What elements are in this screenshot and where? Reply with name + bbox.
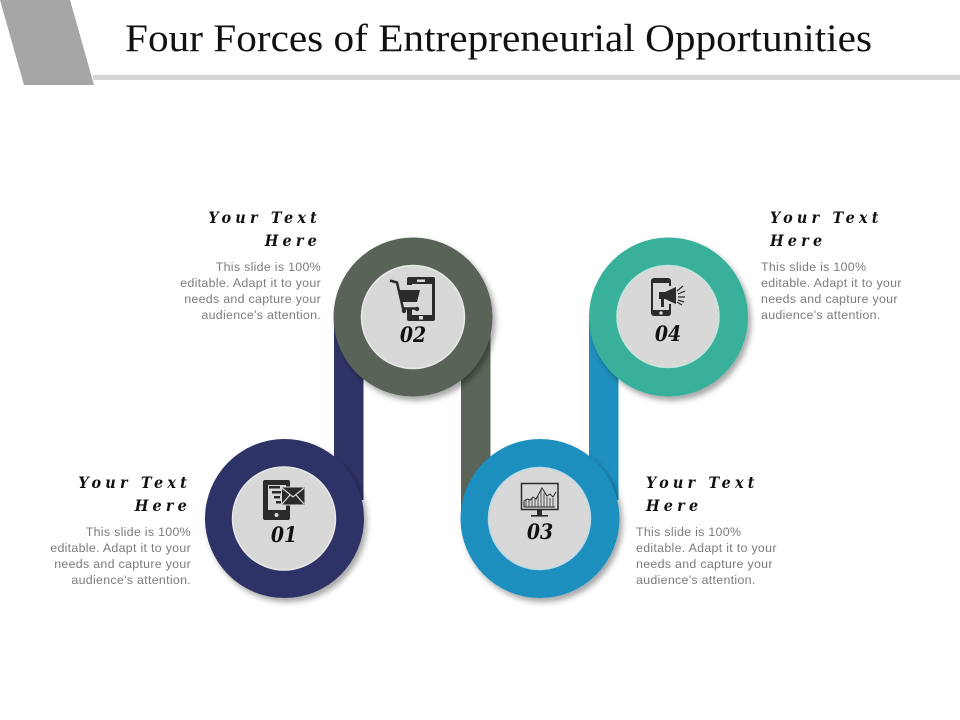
heading 03 bbox=[645, 473, 759, 515]
body 01: This slide is 100% bbox=[86, 525, 191, 539]
connector: grey bar bbox=[461, 330, 490, 510]
heading 01: Your Text bbox=[78, 473, 191, 492]
connector: blue bar bbox=[589, 320, 618, 500]
header rule bbox=[93, 75, 960, 80]
step 03 bbox=[460, 439, 620, 598]
text block 02 bbox=[180, 208, 321, 322]
body 02: This slide is 100% bbox=[216, 260, 321, 274]
body 03 bbox=[636, 525, 777, 587]
heading 01: Here bbox=[134, 496, 191, 515]
connector: navy bar bbox=[334, 320, 364, 500]
body 04: This slide is 100% bbox=[761, 260, 866, 274]
body 04: editable. Adapt it to your bbox=[761, 276, 902, 290]
body 03: editable. Adapt it to your bbox=[636, 541, 777, 555]
heading 02: Your Text bbox=[208, 208, 321, 227]
body 03: This slide is 100% bbox=[636, 525, 741, 539]
ring 04 bbox=[589, 238, 748, 396]
ring 01 bbox=[205, 439, 364, 598]
step 02 bbox=[334, 238, 492, 396]
body 04 bbox=[761, 260, 902, 322]
body 01: needs and capture your bbox=[54, 557, 191, 571]
title: Four Forces of Entrepreneurial Opportunities bbox=[125, 17, 872, 60]
header accent shape bbox=[0, 0, 94, 85]
disc 03 bbox=[488, 468, 590, 570]
heading 04 bbox=[769, 208, 883, 250]
body 04: needs and capture your bbox=[761, 292, 898, 306]
body 03: audience's attention. bbox=[636, 573, 756, 587]
number 03: 03 bbox=[527, 519, 553, 544]
text block 03 bbox=[636, 473, 777, 587]
heading 01 bbox=[78, 473, 191, 515]
body 02 bbox=[180, 260, 321, 322]
body 02: editable. Adapt it to your bbox=[180, 276, 321, 290]
heading 02 bbox=[208, 208, 321, 250]
text block 01 bbox=[50, 473, 191, 587]
disc 02 bbox=[362, 266, 464, 368]
ring 02 bbox=[334, 238, 492, 396]
body 01 bbox=[50, 525, 191, 587]
number 01: 01 bbox=[271, 522, 297, 547]
icon: phone with megaphone bbox=[651, 278, 685, 316]
number 04: 04 bbox=[655, 321, 681, 346]
heading 03: Here bbox=[645, 496, 702, 515]
step 01 bbox=[205, 439, 364, 598]
heading 03: Your Text bbox=[646, 473, 759, 492]
disc 04 bbox=[617, 266, 719, 368]
disc 01 bbox=[232, 467, 336, 570]
heading 04: Your Text bbox=[770, 208, 883, 227]
body 01: audience's attention. bbox=[71, 573, 191, 587]
body 01: editable. Adapt it to your bbox=[50, 541, 191, 555]
heading 02: Here bbox=[264, 231, 321, 250]
number 02: 02 bbox=[400, 322, 426, 347]
body 04: audience's attention. bbox=[761, 308, 881, 322]
icon: phone with envelope bbox=[263, 480, 305, 520]
icon: phone with cart bbox=[390, 277, 435, 321]
body 02: audience's attention. bbox=[201, 308, 321, 322]
body 02: needs and capture your bbox=[184, 292, 321, 306]
heading 04: Here bbox=[769, 231, 826, 250]
text block 04 bbox=[761, 208, 902, 322]
ring 03 bbox=[460, 439, 620, 598]
icon: monitor with chart bbox=[522, 484, 558, 517]
body 03: needs and capture your bbox=[636, 557, 773, 571]
step 04 bbox=[589, 238, 748, 396]
